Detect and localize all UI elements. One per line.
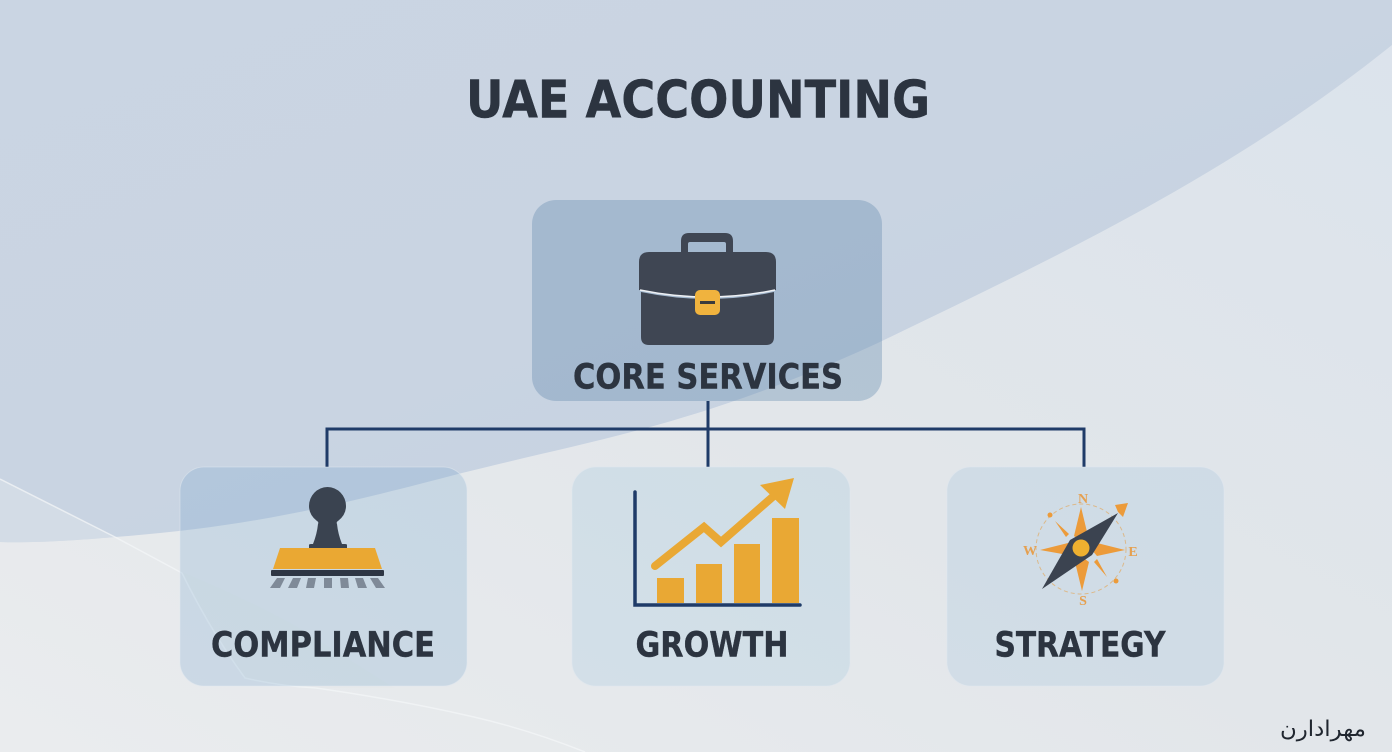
needle — [1042, 513, 1118, 589]
label: strategy: STRATEGY — [994, 626, 1166, 666]
icon: growth chart — [635, 478, 800, 605]
panel: compliance — [180, 467, 467, 686]
icon: briefcase — [639, 233, 776, 345]
label: compliance: COMPLIANCE — [211, 626, 435, 666]
icon: compass: W — [1023, 544, 1037, 559]
panel: strategy — [947, 467, 1224, 686]
icon: compass: S — [1079, 594, 1087, 609]
icon: compass: N — [1078, 492, 1088, 507]
label: growth: GROWTH — [636, 626, 788, 666]
icon: compass — [1023, 492, 1138, 609]
icon: compass: E — [1128, 545, 1138, 560]
label: core services: CORE SERVICES — [573, 358, 843, 398]
connector lines — [327, 401, 1084, 467]
title: UAE ACCOUNTING — [466, 70, 930, 130]
icon: stamp — [270, 487, 385, 588]
panel: growth — [572, 467, 850, 686]
panel: core services — [532, 200, 882, 401]
watermark: مهرادارن — [1280, 717, 1366, 742]
